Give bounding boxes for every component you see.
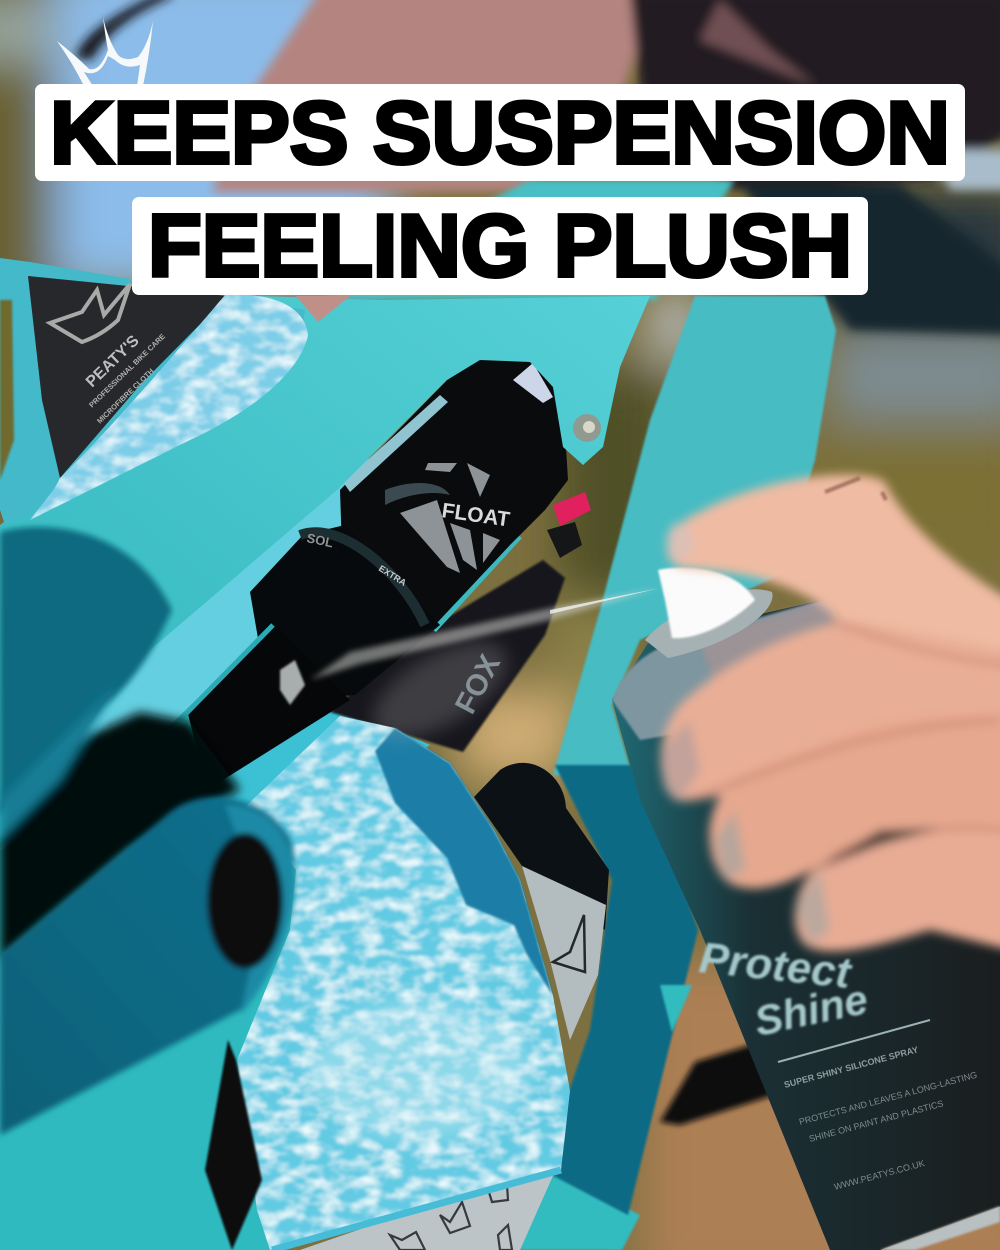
bright strip behind shock	[0, 440, 400, 850]
heading line 1: KEEPS SUSPENSION	[50, 83, 950, 182]
large towel	[237, 716, 570, 1250]
teal below shock shaft	[200, 705, 430, 830]
black gap under tube	[205, 1040, 262, 1250]
label text: PEATY'S	[83, 332, 143, 391]
shock shaft	[187, 622, 350, 790]
shock text: FOX: FOX	[449, 649, 507, 719]
spray can: SUPER SHINY SILICONE SPRAY	[783, 1044, 919, 1090]
bike frame: dark shadow panel	[0, 527, 172, 815]
shock text: SOL: SOL	[305, 530, 335, 551]
linkage: dark blurred pivot	[0, 680, 240, 960]
towel hem	[272, 1170, 561, 1250]
spray mist	[310, 588, 660, 757]
shock pivot bolt	[573, 414, 601, 442]
pink gap behind towel	[296, 296, 350, 322]
small towel on top tube	[0, 258, 308, 525]
ring finger	[709, 714, 1000, 888]
pinky finger	[795, 824, 1000, 951]
knuckle creases	[690, 620, 1000, 858]
spray can: PROTECTS AND LEAVES A LONG-LASTING	[798, 1070, 978, 1127]
hand and fingers	[660, 475, 1000, 951]
can base rim	[880, 1206, 1000, 1250]
bottle crown logo	[553, 915, 585, 972]
black strut behind can	[660, 1042, 790, 1125]
towel shadow fold	[375, 728, 553, 996]
large foreground tube with port	[0, 797, 295, 1135]
index finger and back of hand	[667, 475, 1000, 700]
shock decal: grey shapes	[400, 463, 500, 573]
bike frame: main teal tube	[0, 295, 650, 810]
label crown logo	[50, 284, 130, 342]
lower shock reservoir	[330, 534, 565, 752]
title	[35, 83, 965, 295]
rear shock body	[170, 358, 568, 790]
finger nail	[667, 523, 693, 561]
bike frame: rear stay	[553, 296, 836, 775]
can nozzle	[658, 568, 755, 638]
lower left frame base	[0, 560, 350, 1250]
bike frame: top band behind text	[320, 180, 735, 300]
shock text: FLOAT: FLOAT	[440, 499, 511, 531]
background: rider shirt and dark top	[75, 0, 1000, 335]
spray can	[612, 568, 1000, 1250]
knuckle marks	[825, 478, 886, 500]
small towel on top tube: PROFESSIONAL BIKE CARE	[87, 332, 167, 409]
water bottle	[300, 763, 609, 1250]
shock text: EXTRA VOLUME: EXTRA	[377, 563, 409, 588]
logo: crown outline	[57, 17, 153, 86]
spray can: Shine	[750, 975, 872, 1045]
spray can: WWW.PEATYS.CO.UK	[833, 1158, 926, 1192]
can label text: Protect	[697, 933, 855, 998]
bike frame: lower dark panel	[515, 765, 698, 1250]
pink shock dial	[547, 492, 591, 558]
small towel on top tube: MICROFIBRE CLOTH	[95, 367, 156, 425]
bottle crown pattern	[440, 1202, 470, 1233]
middle finger	[661, 620, 1000, 800]
heading line 2: FEELING PLUSH	[148, 196, 852, 295]
spray can: SHINE ON PAINT AND PLASTICS	[808, 1098, 944, 1144]
